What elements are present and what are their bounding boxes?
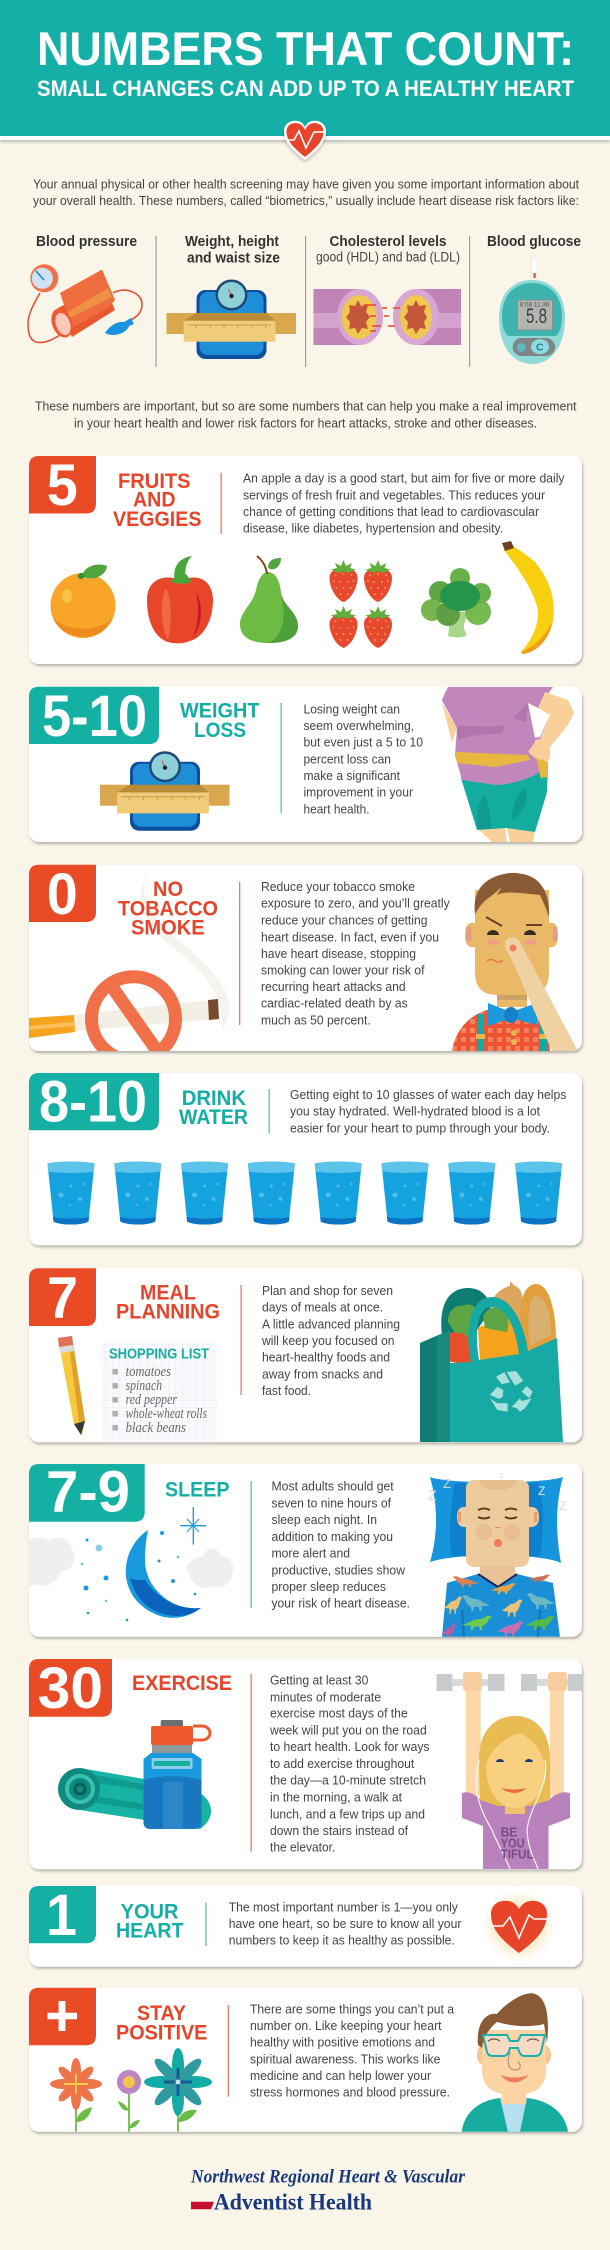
divider — [280, 703, 282, 813]
body text: but even just a 5 to 10 — [304, 735, 423, 750]
divider — [240, 1285, 242, 1395]
divider — [305, 236, 306, 367]
illustration: yoga mat — [58, 1768, 211, 1829]
body text: heart-healthy foods and — [262, 1350, 390, 1365]
heading: WEIGHT — [180, 699, 260, 723]
body text: spiritual awareness. This works like — [250, 2051, 440, 2066]
body text: to heart health. Look for ways — [270, 1739, 430, 1754]
body text: disease, like diabetes, hypertension and obesity. — [243, 521, 503, 536]
heading: weight height waist — [185, 234, 280, 267]
body text: cardiac-related death by as — [261, 996, 408, 1011]
heading — [116, 1899, 184, 1942]
divider — [469, 236, 470, 367]
icons: eight glasses of water — [48, 1162, 562, 1224]
body text — [243, 471, 565, 536]
body text: addition to making you — [272, 1529, 393, 1544]
number badge — [29, 1266, 96, 1331]
number badge: 5 — [47, 453, 78, 518]
body text — [304, 701, 423, 816]
heading — [116, 2001, 207, 2044]
icon: banana — [502, 541, 554, 654]
number badge: 5-10 — [42, 684, 147, 749]
list items: black beans — [126, 1420, 186, 1436]
body text: you stay hydrated. Well-hydrated blood is a lot — [290, 1104, 540, 1119]
body text — [290, 1087, 567, 1135]
body text: stress hormones and blood pressure. — [250, 2085, 450, 2100]
heading: HEART — [116, 1918, 184, 1942]
panel: biometrics — [28, 234, 581, 367]
body text: improvement in your — [304, 785, 414, 800]
illustration: smoke — [141, 870, 230, 1030]
outro text — [35, 399, 577, 430]
icon: strawberries — [330, 560, 392, 648]
heading: STAY — [137, 2001, 186, 2025]
illustration: sleeping man: Z — [443, 1476, 451, 1491]
body text: seem overwhelming, — [304, 718, 414, 733]
icon: blood pressure cuff — [28, 264, 142, 343]
icon: cloud right — [187, 1548, 233, 1588]
body text: to add exercise throughout — [270, 1756, 415, 1771]
illustration: sleeping man: Z — [428, 1487, 437, 1503]
icon: orange — [50, 564, 116, 638]
heading: LOSS — [194, 718, 246, 742]
panel: your heart — [29, 1883, 582, 1967]
number badge: 0 — [47, 862, 78, 927]
body text: sleep each night. In — [272, 1512, 377, 1527]
list items: spinach — [126, 1378, 162, 1394]
divider — [228, 2005, 229, 2097]
body text: Reduce your tobacco smoke — [261, 879, 415, 894]
heading: AND — [133, 488, 176, 512]
body text: exposure to zero, and you’ll greatly — [261, 896, 450, 911]
body text: heart disease. In fact, even if you — [261, 929, 439, 944]
heading — [180, 699, 260, 742]
heading: TOBACCO — [118, 896, 218, 920]
body text: lunch, and a few trips up and — [270, 1806, 425, 1821]
heading: SLEEP — [165, 1478, 230, 1502]
icon: flowers — [50, 2048, 212, 2132]
panel: meal planning — [29, 1266, 582, 1442]
heading: cholesterol: Cholesterol levels — [330, 234, 446, 250]
body text: away from snacks and — [262, 1366, 383, 1381]
number badge: 7 — [47, 1266, 78, 1331]
divider — [268, 1089, 270, 1133]
icon: scale and ruler — [166, 280, 296, 359]
icon: glucose meter: 5.8 — [526, 305, 547, 328]
outro text: in your heart health and lower risk factors for heart attacks, stroke and other diseases. — [74, 415, 537, 430]
body text: percent loss can — [304, 751, 391, 766]
icon: arteries with plaque — [314, 289, 461, 345]
illustration: sleeping man — [428, 1473, 566, 1639]
number badge — [29, 1988, 96, 2045]
body text: There are some things you can’t put a — [250, 2001, 455, 2016]
body text: in the morning, a walk at — [270, 1790, 402, 1805]
illustration: woman lifting dumbbells: TIFUL — [501, 1846, 534, 1861]
intro text: your overall health. These numbers, called “biometrics,” usually include heart disease risk factors like: — [33, 193, 579, 208]
body text — [269, 1673, 430, 1855]
body text — [272, 1479, 410, 1611]
icon: pear — [240, 556, 298, 643]
heading: weight height waist: and waist size — [187, 251, 280, 267]
title: NUMBERS THAT COUNT: — [37, 23, 574, 76]
body text: smoking can lower your risk of — [261, 963, 425, 978]
divider — [205, 1903, 207, 1946]
panel: exercise — [29, 1656, 582, 1869]
body text: the day—a 10-minute stretch — [270, 1773, 426, 1788]
icon: cloud left — [29, 1538, 74, 1586]
body text: The most important number is 1—you only — [229, 1899, 458, 1914]
body text: recurring heart attacks and — [261, 979, 406, 994]
icon: header heart — [284, 121, 326, 160]
number badge: 30 — [38, 1656, 103, 1721]
list items — [126, 1364, 207, 1436]
heading: cholesterol — [316, 234, 460, 265]
body text — [250, 2001, 455, 2100]
body text: healthy with positive emotions and — [250, 2035, 435, 2050]
heading — [116, 1280, 220, 1323]
panel: weight loss — [29, 684, 582, 842]
divider — [239, 882, 240, 1025]
icon: pencil — [58, 1336, 85, 1435]
body text: number on. Like keeping your heart — [250, 2018, 442, 2033]
body text: numbers to keep it as healthy as possible. — [229, 1933, 455, 1948]
body text: Plan and shop for seven — [262, 1283, 393, 1298]
list title: SHOPPING LIST — [109, 1346, 209, 1362]
body text: down the stairs instead of — [270, 1823, 408, 1838]
outro text: These numbers are important, but so are some numbers that can help you make a real improvement — [35, 399, 577, 414]
body text: minutes of moderate — [270, 1689, 381, 1704]
heading: MEAL — [140, 1280, 196, 1304]
heading: cholesterol: good (HDL) and bad (LDL) — [316, 250, 460, 265]
illustration: sleeping man: Z — [499, 1473, 504, 1480]
panel: stay positive — [29, 1988, 582, 2132]
icon: glucose meter: C — [536, 342, 544, 354]
list items: tomatoes — [126, 1364, 171, 1380]
list items: whole-wheat rolls — [126, 1406, 207, 1422]
intro text: Your annual physical or other health screening may have given you some important information about — [33, 176, 579, 192]
body text: make a significant — [304, 768, 400, 783]
body text: An apple a day is a good start, but aim for five or more daily — [243, 471, 565, 486]
body text: your risk of heart disease. — [272, 1596, 410, 1611]
heading: FRUITS — [118, 469, 191, 493]
body text: chance of getting conditions that lead to cardiovascular — [243, 504, 540, 519]
heading: YOUR — [121, 1899, 179, 1923]
body text: seven to nine hours of — [272, 1495, 391, 1510]
heading: blood glucose: Blood glucose — [487, 234, 581, 250]
heading — [113, 469, 202, 531]
illustration: smiling man with glasses — [462, 1993, 568, 2132]
illustration: sleeping man: Z — [538, 1484, 545, 1498]
number badge: 8-10 — [39, 1070, 147, 1135]
list items: red pepper — [126, 1392, 177, 1408]
icon: glucose meter: 8:08 11:36 — [520, 302, 550, 308]
illustration: woman lifting dumbbells: YOU — [501, 1836, 525, 1851]
body text: heart health. — [304, 801, 370, 816]
body text — [229, 1899, 462, 1948]
heading: WATER — [179, 1105, 248, 1129]
body text: exercise most days of the — [270, 1706, 408, 1721]
illustration: sleeping man: Z — [559, 1499, 566, 1513]
body text: Getting at least 30 — [270, 1673, 368, 1688]
panel: sleep — [29, 1460, 582, 1639]
number badge: 1 — [46, 1883, 77, 1948]
header banner — [0, 0, 610, 140]
number badge — [29, 862, 96, 927]
number badge — [29, 453, 96, 518]
body text: easier for your heart to pump through your body. — [290, 1120, 550, 1135]
body text: much as 50 percent. — [261, 1012, 371, 1027]
heading: PLANNING — [116, 1299, 220, 1323]
heading: VEGGIES — [113, 507, 202, 531]
heading: SMOKE — [131, 916, 205, 940]
illustration: water bottle — [144, 1720, 210, 1829]
body text: have one heart, so be sure to know all your — [229, 1916, 462, 1931]
body text — [261, 1283, 400, 1398]
heading: DRINK — [182, 1086, 246, 1110]
illustration: woman lifting dumbbells — [436, 1672, 582, 1869]
icon: stars and dots — [81, 1507, 206, 1621]
divider — [250, 1674, 252, 1852]
illustration: grocery bag — [420, 1281, 563, 1442]
heading: weight height waist: Weight, height — [185, 234, 279, 250]
body text: Most adults should get — [272, 1479, 394, 1494]
icon: glowing heart — [490, 1897, 548, 1955]
icon: red pepper — [147, 556, 213, 643]
heading — [179, 1086, 248, 1129]
icon: scale and ruler — [100, 751, 230, 831]
body text: Getting eight to 10 glasses of water each day helps — [290, 1087, 567, 1102]
body text: days of meals at once. — [262, 1300, 383, 1315]
body text: the elevator. — [270, 1840, 335, 1855]
icon: broccoli — [421, 568, 491, 637]
body text: will keep you focused on — [261, 1333, 394, 1348]
illustration: man holding nose — [452, 873, 578, 1051]
heading: NO — [153, 877, 183, 901]
body text: A little advanced planning — [262, 1316, 400, 1331]
icon: glucose meter — [499, 258, 565, 364]
body text: week will put you on the road — [269, 1722, 427, 1737]
intro text — [33, 176, 579, 208]
heading — [118, 877, 218, 940]
number badge: 7-9 — [46, 1460, 130, 1525]
logo: Northwest Regional Heart and Vascular: Northwest Regional Heart & Vascular — [190, 2167, 466, 2188]
body text: fast food. — [262, 1383, 311, 1398]
heading: POSITIVE — [116, 2020, 207, 2044]
list checkboxes — [112, 1369, 118, 1430]
body text: medicine and can help lower your — [250, 2068, 432, 2083]
body text: reduce your chances of getting — [261, 912, 428, 927]
illustration: person measuring waist — [442, 687, 574, 842]
body text: more alert and — [272, 1546, 350, 1561]
panel: drink water — [29, 1070, 582, 1245]
body text: servings of fresh fruit and vegetables. This reduces your — [243, 487, 546, 502]
heading: EXERCISE — [132, 1671, 232, 1695]
illustration: no smoking sign and cigarette — [29, 977, 219, 1061]
divider — [156, 236, 157, 367]
logo: Adventist Health: Adventist Health — [214, 2189, 372, 2214]
divider — [250, 1481, 252, 1608]
icon: moon — [126, 1530, 201, 1618]
number badge — [29, 1883, 96, 1948]
body text: productive, studies show — [272, 1562, 406, 1577]
body text: Losing weight can — [304, 701, 400, 716]
divider — [220, 473, 222, 534]
shopping list — [101, 1343, 217, 1442]
body text — [261, 879, 450, 1027]
body text: have heart disease, stopping — [261, 946, 416, 961]
body text: proper sleep reduces — [272, 1579, 386, 1594]
heading: blood pressure: Blood pressure — [36, 234, 137, 250]
illustration: woman lifting dumbbells: BE — [501, 1825, 518, 1840]
panel: no tobacco smoke — [29, 862, 582, 1061]
panel: fruits and veggies — [29, 453, 582, 664]
